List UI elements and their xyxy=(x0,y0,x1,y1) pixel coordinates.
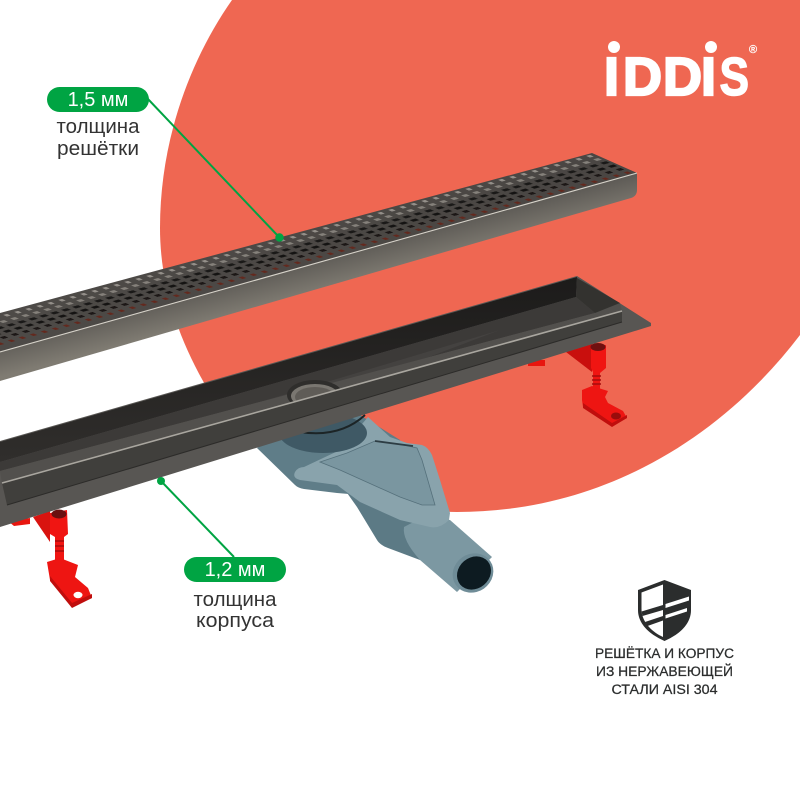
drain ring xyxy=(287,380,343,410)
text: material note: ИЗ НЕРЖАВЕЮЩЕЙ xyxy=(596,664,733,679)
callout: body thickness: корпуса xyxy=(196,610,275,632)
callout: body thickness xyxy=(157,477,286,632)
leg: right red adjustable support xyxy=(528,343,627,427)
logo: IDDIS: S xyxy=(720,47,749,107)
icon: shield xyxy=(638,580,691,641)
grate top surface xyxy=(0,153,637,352)
siphon triangle housing xyxy=(294,417,450,527)
channel floor xyxy=(0,297,595,471)
text: material note xyxy=(595,646,734,697)
rim top xyxy=(0,303,622,483)
rim highlight xyxy=(2,311,622,483)
callout: grate thickness xyxy=(47,87,284,242)
text: material note: РЕШЁТКА И КОРПУС xyxy=(595,646,734,661)
leg: left red adjustable support xyxy=(8,510,92,608)
drain channel body xyxy=(0,276,651,527)
logo: IDDIS: IDDI xyxy=(604,47,716,107)
label: толщина xyxy=(56,116,140,138)
grate holes xyxy=(0,153,637,352)
pill xyxy=(47,87,149,112)
callout: grate thickness: решётки xyxy=(57,138,139,160)
channel end wall xyxy=(576,278,620,313)
logo: IDDIS: ® xyxy=(749,44,757,56)
siphon cup xyxy=(279,413,367,453)
logo: IDDIS xyxy=(604,41,757,107)
callout: grate thickness: 1,5 мм xyxy=(68,89,128,111)
siphon base flange xyxy=(257,415,420,500)
background: coral circle xyxy=(160,0,800,512)
grate: perforated cover xyxy=(0,153,637,381)
leader line xyxy=(147,98,279,237)
text: material note: СТАЛИ AISI 304 xyxy=(612,682,718,697)
label: толщина xyxy=(194,589,277,611)
siphon lower body xyxy=(345,490,445,560)
channel back wall xyxy=(0,277,577,462)
leader line xyxy=(161,481,234,557)
grate side face xyxy=(0,173,637,381)
callout: body thickness: 1,2 мм xyxy=(205,559,265,581)
grate front edge highlight xyxy=(0,173,637,352)
pipe outlet xyxy=(404,516,501,601)
siphon: grey-blue drain body xyxy=(257,413,501,601)
front wall xyxy=(2,311,622,505)
flange xyxy=(0,276,651,527)
pill xyxy=(184,557,286,582)
